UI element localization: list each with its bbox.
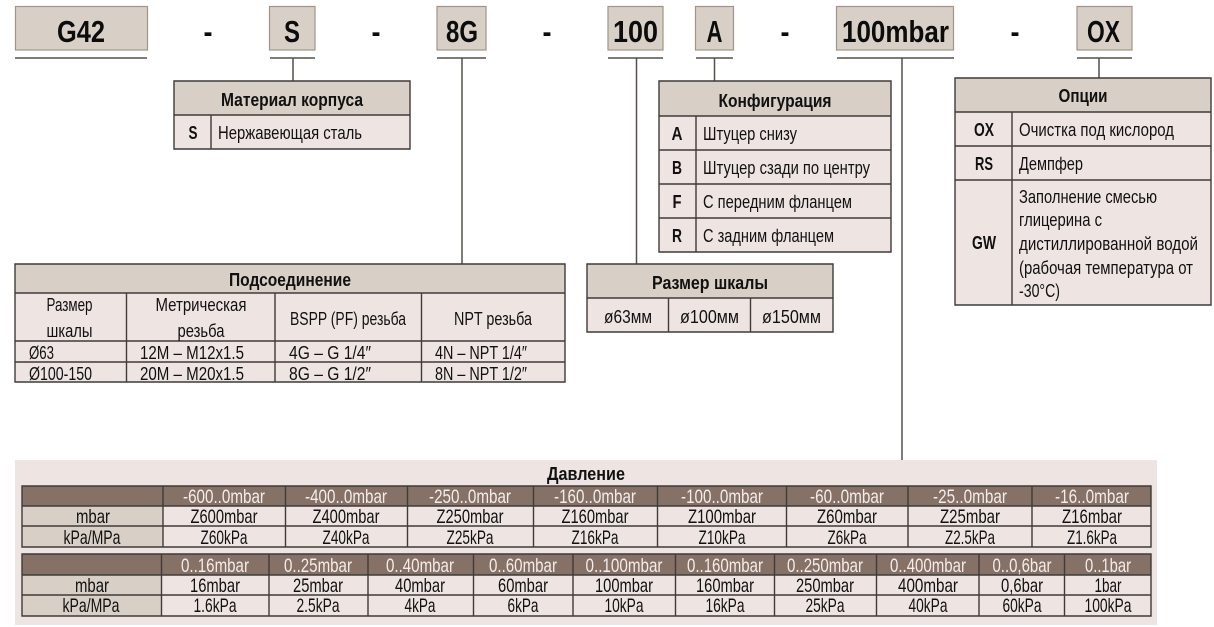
vacuum mbar row: Z60mbar (817, 506, 877, 528)
row: 63 (29, 343, 528, 363)
row: R: С задним фланцем (703, 226, 834, 246)
positive header row (181, 555, 1131, 577)
row: GW: Заполнение смесью (1019, 187, 1157, 207)
code segment: 100: 100 (613, 14, 658, 49)
row: R: R (672, 226, 682, 246)
column headers: шкалы (46, 321, 92, 341)
vacuum header row: -400..0mbar (305, 486, 387, 508)
row: 63: Ø63 (29, 343, 54, 363)
code segment: 100mbar: 100mbar (842, 14, 949, 49)
code segment: A: A (706, 14, 722, 49)
separator dash 2: - (372, 14, 380, 49)
positive kPa row: 40kPa (908, 595, 948, 617)
code segment: 100 (608, 6, 663, 264)
positive header row: 0..60mbar (489, 555, 557, 577)
vacuum kPa row: Z40kPa (322, 527, 370, 549)
positive kPa row (62, 595, 1132, 617)
code segment: S: S (284, 14, 300, 49)
vacuum mbar row: Z25mbar (940, 506, 1000, 528)
vacuum kPa row: Z25kPa (446, 527, 494, 549)
positive header row: 0..250mbar (787, 555, 863, 577)
panel: case material (174, 81, 410, 149)
separator dash 1: - (204, 14, 212, 49)
positive header row: 0..40mbar (386, 555, 454, 577)
row: F: F (672, 192, 682, 212)
positive kPa row: 2.5kPa (296, 595, 340, 617)
row: S: S (188, 123, 198, 143)
positive mbar row: 400mbar (898, 575, 958, 597)
row: F: С передним фланцем (703, 192, 852, 212)
positive header row: 0..400mbar (890, 555, 966, 577)
vacuum mbar row (76, 506, 1122, 528)
separator dash 5: - (1010, 14, 1020, 49)
row: A (672, 124, 797, 144)
vacuum header row: -16..0mbar (1055, 486, 1129, 508)
column headers: NPT резьба (454, 309, 533, 329)
positive kPa row: 6kPa (508, 595, 539, 617)
row: A: A (672, 124, 682, 144)
heading: pressure: Давление (547, 464, 625, 484)
vacuum mbar row: Z100mbar (688, 506, 756, 528)
row: OX: OX (974, 120, 994, 140)
vacuum kPa row (64, 527, 1117, 549)
separator dash 4: - (780, 14, 790, 49)
vacuum header row (183, 486, 1129, 508)
positive header row: 0..100mbar (586, 555, 663, 577)
row: B: B (672, 158, 682, 178)
panel: pressure (15, 460, 1157, 625)
code segment: OX: OX (1087, 14, 1120, 49)
positive mbar row: mbar (75, 575, 109, 597)
heading: dial size: Размер шкалы (652, 273, 768, 293)
row: 100-150: 8G – G 1/2″ (289, 364, 372, 384)
size values (604, 307, 821, 327)
positive kPa row: 1.6kPa (194, 595, 237, 617)
code segment: G42 (15, 6, 148, 58)
positive mbar row: 250mbar (796, 575, 854, 597)
row: R (672, 226, 834, 246)
positive header row: 0..1bar (1085, 555, 1131, 577)
row: 63: 4G – G 1/4″ (289, 343, 372, 363)
column headers: Размер (46, 295, 92, 315)
row: GW: глицерина с (1019, 210, 1102, 230)
row: GW (972, 187, 1198, 301)
positive mbar row: 1bar (1094, 575, 1122, 597)
row: A: Штуцер снизу (703, 124, 797, 144)
positive kPa row: 10kPa (604, 595, 644, 617)
row: B: Штуцер сзади по центру (703, 158, 870, 178)
positive kPa row: 60kPa (1002, 595, 1042, 617)
heading: configuration: Конфигурация (718, 91, 832, 111)
row: OX: Очистка под кислород (1019, 120, 1174, 140)
separator dash 3: - (542, 14, 552, 49)
size values: ø150мм (762, 307, 821, 327)
vacuum kPa row: kPa/MPa (64, 527, 121, 549)
table: vacuum ranges (22, 486, 1151, 549)
vacuum mbar row: mbar (76, 506, 110, 528)
code segment: G42: G42 (57, 14, 105, 49)
positive mbar row: 100mbar (595, 575, 653, 597)
row: RS: Демпфер (1019, 154, 1083, 174)
positive header row: 0..160mbar (687, 555, 763, 577)
column headers: резьба (178, 321, 225, 341)
positive kPa row: kPa/MPa (62, 595, 120, 617)
row: S: Нержавеющая сталь (218, 123, 362, 143)
row: 100-150: 20M – M20x1.5 (140, 364, 244, 384)
column headers (46, 295, 533, 341)
heading: case material: Материал корпуса (221, 90, 364, 110)
row: 63: 12M – M12x1.5 (140, 343, 244, 363)
vacuum kPa row: Z6kPa (828, 527, 867, 549)
positive mbar row: 40mbar (395, 575, 445, 597)
code segment: 8G (437, 6, 486, 264)
code segment: A (696, 6, 734, 81)
vacuum kPa row: Z1.6kPa (1067, 527, 1117, 549)
positive mbar row: 16mbar (190, 575, 240, 597)
row: 100-150: Ø100-150 (29, 364, 92, 384)
heading: options: Опции (1058, 86, 1108, 106)
positive kPa row: 100kPa (1084, 595, 1132, 617)
row: RS (975, 154, 1083, 174)
size values: ø63мм (604, 307, 652, 327)
vacuum kPa row: Z10kPa (698, 527, 746, 549)
positive header row: 0..25mbar (284, 555, 352, 577)
positive kPa row: 16kPa (706, 595, 745, 617)
vacuum mbar row: Z16mbar (1062, 506, 1122, 528)
panel: connection (15, 264, 565, 384)
vacuum header row: -100..0mbar (681, 486, 763, 508)
code segment: 8G: 8G (446, 14, 478, 49)
vacuum kPa row: Z16kPa (572, 527, 619, 549)
vacuum header row: -600..0mbar (183, 486, 265, 508)
vacuum header row: -160..0mbar (554, 486, 636, 508)
positive mbar row: 0,6bar (1001, 575, 1043, 597)
size values: ø100мм (680, 307, 739, 327)
positive header row: 0..16mbar (181, 555, 249, 577)
positive mbar row: 60mbar (498, 575, 548, 597)
vacuum header row: -60..0mbar (810, 486, 884, 508)
positive kPa row: 25kPa (806, 595, 845, 617)
code segment: S (270, 6, 315, 81)
row: RS: RS (975, 154, 993, 174)
heading: connection: Подсоединение (229, 270, 351, 290)
column headers: BSPP (PF) резьба (290, 309, 407, 329)
row: OX (974, 120, 1174, 140)
vacuum mbar row: Z250mbar (436, 506, 504, 528)
code segment: 100mbar (836, 6, 954, 460)
row: F (672, 192, 852, 212)
table: positive ranges (22, 554, 1151, 617)
vacuum kPa row: Z2.5kPa (945, 527, 995, 549)
positive header row: 0..0,6bar (992, 555, 1052, 577)
panel: configuration (659, 81, 891, 252)
vacuum header row: -25..0mbar (933, 486, 1007, 508)
positive mbar row: 160mbar (696, 575, 754, 597)
positive kPa row: 4kPa (404, 595, 436, 617)
vacuum mbar row: Z400mbar (312, 506, 380, 528)
positive mbar row: 25mbar (293, 575, 343, 597)
code segment: OX (1077, 6, 1132, 78)
column headers: Метрическая (156, 295, 246, 315)
vacuum header row: -250..0mbar (429, 486, 511, 508)
panel: dial size (587, 264, 833, 332)
vacuum kPa row: Z60kPa (200, 527, 248, 549)
vacuum mbar row: Z600mbar (190, 506, 258, 528)
positive mbar row (75, 575, 1122, 597)
row: 100-150: 8N – NPT 1/2″ (435, 364, 528, 384)
row: 63: 4N – NPT 1/4″ (435, 343, 528, 363)
vacuum mbar row: Z160mbar (562, 506, 629, 528)
row: 100-150 (29, 364, 528, 384)
row: GW: GW (972, 233, 996, 253)
panel: options (955, 78, 1211, 305)
row: GW: -30°C) (1019, 281, 1060, 301)
